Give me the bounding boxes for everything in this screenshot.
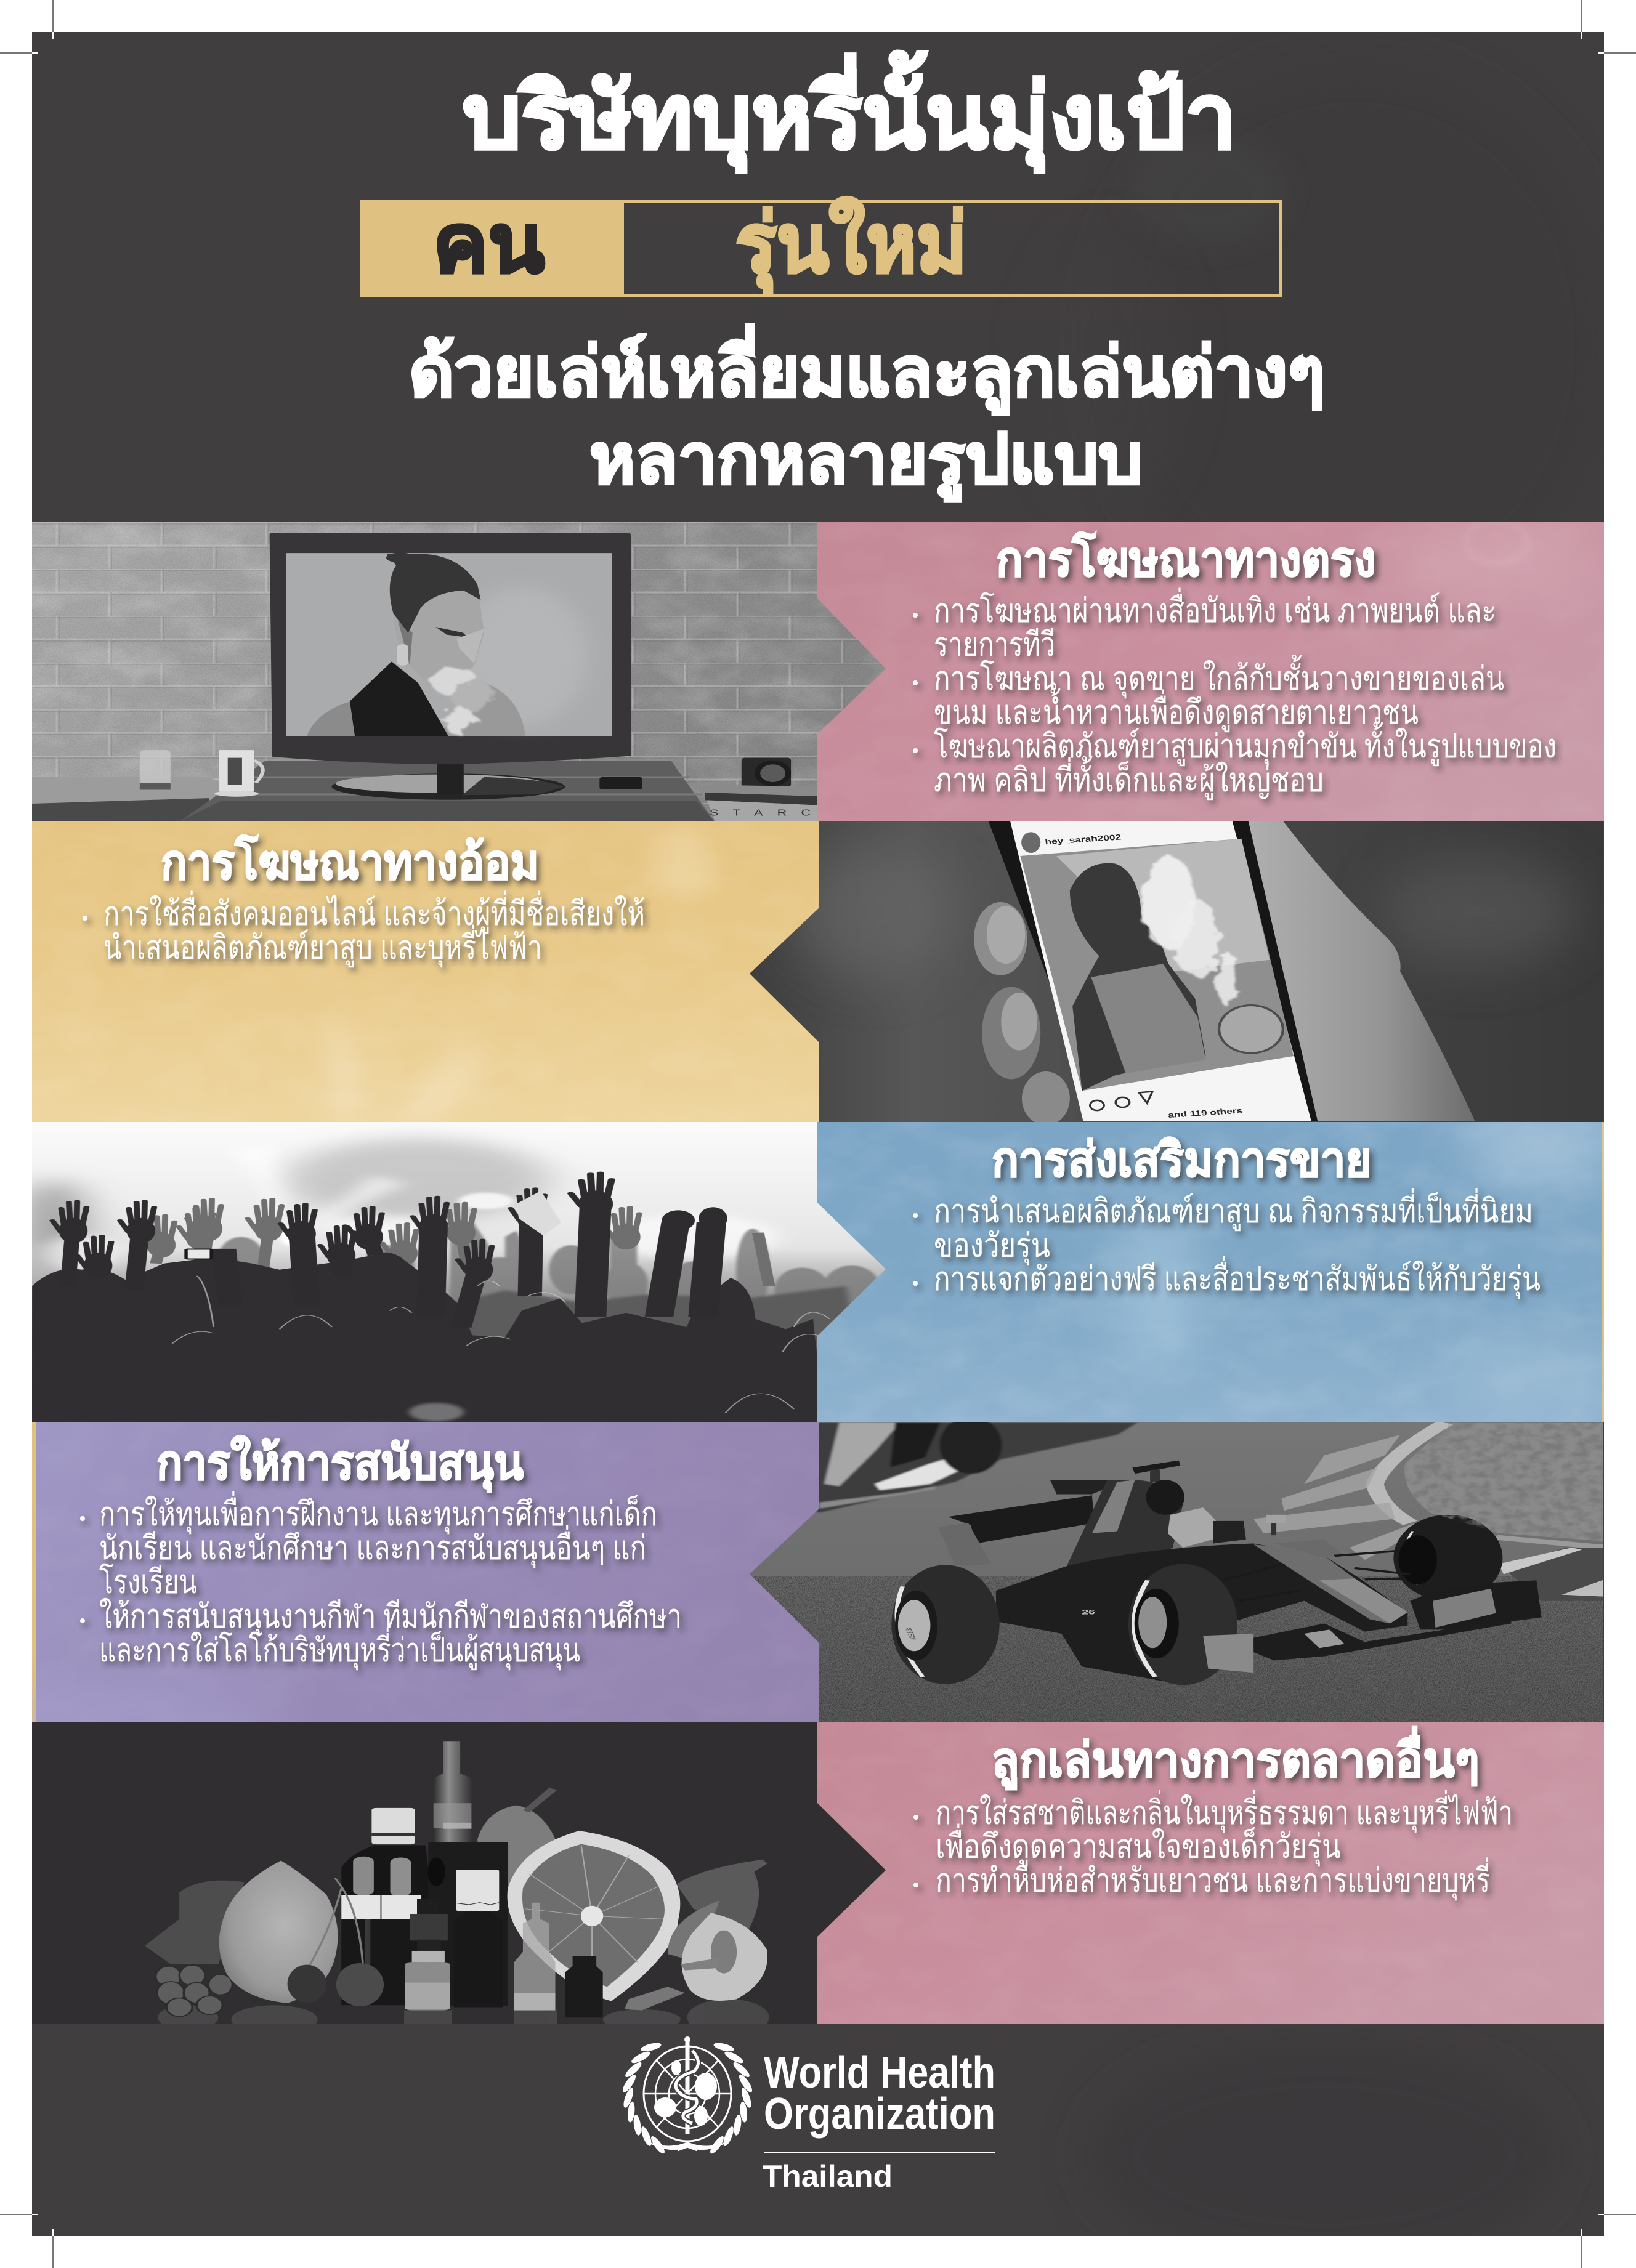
bullet list: sponsorship: และการใส่โลโก้บริษัทบุหรี่ว่าเป็นผู้สนุบสนุน <box>99 1627 580 1671</box>
logo: WHO wordmark: Thailand <box>763 2159 893 2193</box>
continents <box>654 2060 717 2126</box>
photo: phone showing social media post <box>739 821 1608 1126</box>
phone screen <box>1010 821 1311 1121</box>
logo: WHO emblem <box>620 2035 755 2157</box>
rim lit heads <box>172 1276 830 1413</box>
peach <box>219 1860 338 2003</box>
profile circle <box>1021 832 1040 853</box>
track stripes <box>1253 1435 1415 1560</box>
rear wheel <box>891 1565 1000 1684</box>
wheel far side <box>1393 1515 1502 1601</box>
front wing <box>1410 1580 1542 1629</box>
camera pod <box>1132 1461 1180 1474</box>
bullet list: sponsorship: นักเรียน และนักศึกษา และการสนับสนุนอื่นๆ แก่ <box>99 1525 646 1568</box>
vape tank <box>434 1741 471 1842</box>
kerb <box>1375 1423 1446 1523</box>
engine cover <box>1067 1480 1183 1572</box>
fingers <box>974 902 1027 975</box>
suspension arms <box>1223 1551 1410 1601</box>
apricot half <box>681 1913 767 2001</box>
TV frame <box>270 533 631 764</box>
bullet list: other marketing tactics <box>913 1790 1513 1901</box>
post photo <box>1020 839 1294 1091</box>
bullet list: sponsorship: การให้ทุนเพื่อการฝึกงาน และทุนการศึกษาแก่เด็ก <box>99 1491 657 1535</box>
small glass vial <box>405 1962 450 2011</box>
bullet list: sponsorship <box>80 1491 682 1671</box>
reflection floor <box>158 1999 769 2036</box>
sponsor number: 26 <box>1082 1608 1095 1616</box>
chassis <box>996 1543 1407 1683</box>
driver helmet <box>1168 1507 1218 1548</box>
bullet list: sponsorship: โรงเรียน <box>99 1563 197 1600</box>
mug <box>219 750 254 793</box>
cap bottle back <box>341 1845 434 1919</box>
photo: television showing woman vaping: STARCK <box>710 807 848 818</box>
center bottle with white cap <box>456 1870 499 1911</box>
subtitle: หลากหลายรูปแบบ <box>589 421 1143 502</box>
panel: other marketing tactics <box>817 1722 1604 2024</box>
action icons <box>1090 1091 1152 1110</box>
black small bottle <box>565 1956 603 2017</box>
photo: racing car <box>739 1416 1608 1722</box>
grapes <box>156 1965 232 2017</box>
drum <box>1219 1005 1283 1053</box>
logo: WHO wordmark: Organization <box>764 2089 995 2139</box>
photo: concert crowd <box>21 1122 894 1424</box>
back row crowd <box>216 1221 879 1313</box>
cherries <box>309 1878 363 1966</box>
bullet list: sponsorship: ให้การสนับสนุนงานกีฬา ทีมนักกีฬาของสถานศึกษา <box>99 1597 682 1637</box>
bullet list: direct advertising: รายการทีวี <box>934 626 1055 663</box>
rear car in background <box>809 1416 1138 1513</box>
rear wing <box>948 1495 1095 1543</box>
face <box>393 591 484 690</box>
photo: racing car: APTECH <box>903 1627 917 1641</box>
grey mid crowd <box>439 1286 857 1347</box>
turtleneck <box>350 661 448 736</box>
glass dropper vial right <box>514 1903 556 2011</box>
highlighted title box: คน รุ่นใหม่: รุ่นใหม่ <box>735 197 967 294</box>
bullet list: other marketing tactics: การทำหีบห่อสำหรับเยาวชน และการแบ่งขายบุหรี่ <box>936 1857 1490 1901</box>
photo: phone showing social media post: hey_sarah2002 <box>1045 833 1122 847</box>
distant raised hands <box>140 1199 641 1266</box>
heading: sales promotion: การส่งเสริมการขาย <box>992 1132 1372 1187</box>
leaf left <box>145 1881 244 1964</box>
pear back <box>477 1806 556 1888</box>
flag <box>516 1191 561 1236</box>
logo: WHO wordmark: World Health <box>764 2048 995 2097</box>
raised arms <box>68 1198 711 1327</box>
bullet list: sales promotion: ของวัยรุ่น <box>934 1227 1050 1266</box>
vape mod <box>428 1842 508 2006</box>
logo: WHO wordmark <box>763 2048 995 2193</box>
stage haze <box>21 1139 549 1270</box>
grass verge <box>1404 1423 1608 1541</box>
bullet list: indirect advertising <box>83 890 645 968</box>
earring <box>397 644 408 666</box>
bullet list: sales promotion <box>913 1188 1541 1299</box>
panel: sales promotion <box>817 1108 1614 1422</box>
photo: vape bottles and fruit <box>32 1722 894 2036</box>
highlighted title box: คน รุ่นใหม่: คน <box>433 198 545 289</box>
man silhouette <box>1070 863 1205 1091</box>
bullet list: direct advertising: ขนม และน้ำหวานเพื่อดึงดูดสายตาเยาวชน <box>934 688 1419 732</box>
bullet list: indirect advertising: นำเสนอผลิตภัณฑ์ยาสูบ และบุหรี่ไฟฟ้า <box>103 924 542 968</box>
phone body <box>988 821 1318 1121</box>
vapour <box>1142 856 1239 1006</box>
photo: phone showing social media post: and 119 others <box>1168 1107 1243 1120</box>
mirror <box>1266 1515 1286 1523</box>
bullet list: direct advertising: ภาพ คลิป ที่ทั้งเด็กและผู้ใหญ่ชอบ <box>934 756 1324 800</box>
hair <box>387 554 480 633</box>
TV screen <box>286 553 612 736</box>
highlighted title box: คน รุ่นใหม่ <box>360 197 1281 297</box>
dropper small <box>410 1914 448 1940</box>
subtitle <box>409 323 1325 502</box>
desk <box>180 761 715 821</box>
hand palm <box>1243 821 1475 1121</box>
heading: sponsorship: การให้การสนับสนุน <box>156 1435 524 1493</box>
box on table <box>599 777 642 789</box>
bullet list: other marketing tactics: เพื่อดึงดูดความสนใจของเด็กวัยรุ่น <box>936 1823 1341 1867</box>
panel: indirect advertising <box>32 821 827 1122</box>
stage beams <box>43 1147 780 1272</box>
smoke <box>431 666 494 735</box>
left shelf with books <box>32 777 219 804</box>
woman <box>307 698 445 736</box>
candle jar <box>140 750 171 789</box>
bullet list: direct advertising <box>913 587 1557 800</box>
subtitle: ด้วยเล่ห์เหลี่ยมและลูกเล่นต่างๆ <box>409 323 1325 415</box>
panel: sponsorship <box>0 1422 827 1749</box>
bullet list: direct advertising: การโฆษณาผ่านทางสื่อบันเทิง เช่น ภาพยนต์ และ <box>934 587 1496 629</box>
bullet list: indirect advertising: การใช้สื่อสังคมออนไลน์ และจ้างผู้ที่มีชื่อเสียงให้ <box>103 890 645 934</box>
books <box>704 785 817 796</box>
front wheel <box>1128 1564 1237 1685</box>
nose <box>1253 1544 1407 1623</box>
panel: direct advertising <box>817 517 1604 821</box>
leaves right <box>676 1860 767 1935</box>
staff and serpent <box>685 2038 690 2134</box>
phone held up <box>186 1249 211 1259</box>
grass texture <box>1398 1422 1608 1545</box>
main title: บริษัทบุหรี่นั้นมุ่งเป้า <box>463 50 1237 173</box>
heading: other marketing tactics: ลูกเล่นทางการตลาดอื่นๆ <box>991 1726 1480 1790</box>
grapefruit <box>508 1831 680 2001</box>
bullet list: direct advertising: การโฆษณา ณ จุดขาย ใกล้กับชั้นวางขายของเล่น <box>934 655 1504 699</box>
dark crowd mass <box>32 1253 824 1424</box>
heading: direct advertising: การโฆษณาทางตรง <box>996 531 1376 586</box>
photo: television showing woman vaping <box>32 522 894 821</box>
stand and base <box>331 773 565 800</box>
laurels <box>620 2035 755 2157</box>
heading: indirect advertising: การโฆษณาทางอ้อม <box>161 834 539 889</box>
camera <box>742 758 791 787</box>
